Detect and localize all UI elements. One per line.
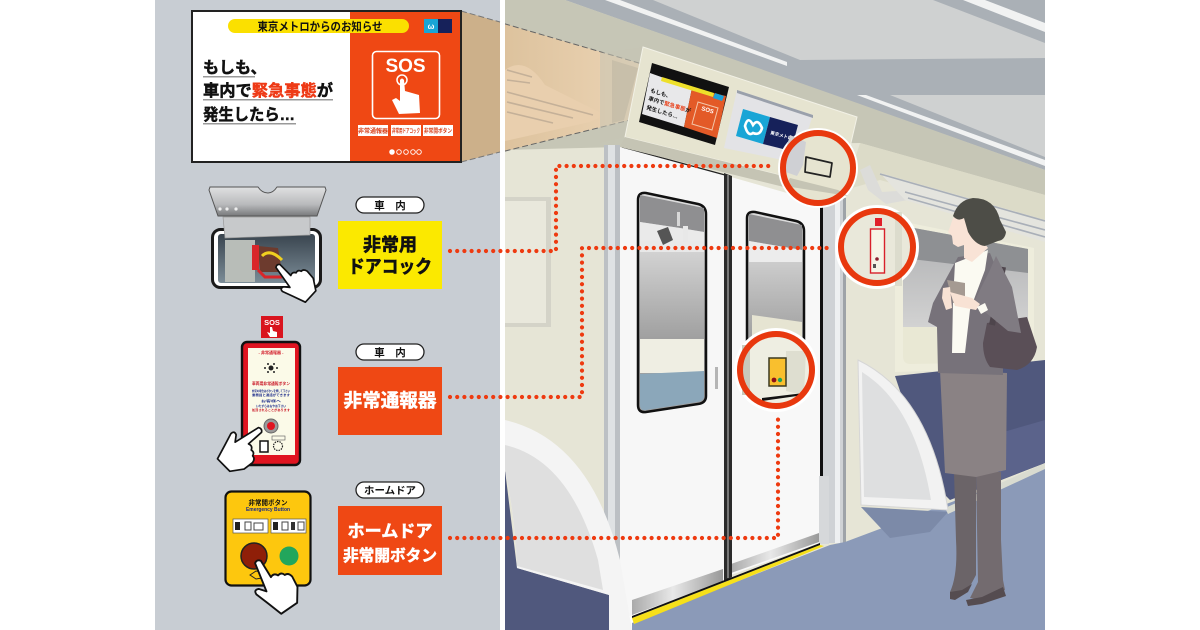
button panel: [226, 492, 310, 586]
callout circle: platform door button: [737, 328, 815, 409]
cock mechanism: [225, 240, 282, 282]
device text: 非常の場合はボタンを押して下さい: [252, 388, 290, 393]
neck and face: [948, 218, 988, 262]
notice pill: 東京メトロからのお知らせ: [258, 20, 382, 34]
orange box: [338, 367, 442, 435]
hinge plate: [223, 217, 310, 238]
dotted connector: platform door button: [450, 418, 778, 538]
callout circle: door cock: [778, 128, 858, 208]
SOS tag: [261, 316, 283, 338]
speaker and switch: [260, 436, 285, 452]
device text: - 非常通報器 -: [259, 349, 284, 355]
headline: 車内で緊急事態が: [203, 81, 333, 100]
on-board display: もしも、: [649, 87, 672, 100]
three small labels: [358, 125, 453, 136]
intercom illustration: [210, 316, 300, 478]
callout circle: emergency intercom: [835, 205, 919, 289]
metro sign: 東京メトロ: [769, 129, 793, 142]
green button: [280, 546, 298, 566]
orange box: [338, 506, 442, 575]
right door: [731, 177, 822, 575]
device text: 乗務員と通話ができます: [252, 392, 290, 397]
upper wall shade: [505, 0, 1045, 195]
seat partition right: [858, 360, 948, 510]
label: door cock: [338, 197, 442, 289]
jacket arm: [975, 256, 1021, 333]
skirt: [940, 370, 1007, 477]
SOS tag: SOS: [264, 318, 280, 327]
floor: [632, 463, 1045, 630]
white divider: [500, 0, 505, 630]
bag: [983, 317, 1037, 370]
notice pill: [228, 19, 409, 34]
device text: いたずらはおやめ下さい: [256, 403, 286, 408]
box text: [348, 235, 432, 277]
instruction plates: [233, 519, 306, 533]
label: intercom: [338, 344, 442, 435]
panel title: [246, 498, 291, 513]
device text: [252, 349, 290, 412]
location pill: 車 内: [374, 346, 406, 359]
door right black edge: [820, 198, 823, 476]
SOS button: [372, 52, 440, 118]
door cock illustration: [209, 187, 326, 310]
location pill: ホームドア: [364, 485, 416, 497]
right door window: [746, 210, 806, 341]
box text: 非常通報器: [344, 390, 437, 411]
box text: [343, 522, 437, 565]
SOS button: SOS: [385, 56, 426, 77]
door sill yellow strip: [632, 545, 824, 624]
location pill: 車 内: [374, 199, 406, 212]
metro logo: [424, 19, 452, 33]
ad frame on left wall: [505, 197, 551, 327]
red button: [241, 543, 267, 569]
small arrow: [250, 571, 262, 579]
seat partition left: [505, 420, 632, 630]
three small labels: 非常開ボタン: [424, 127, 452, 135]
dotted connector: door cock: [450, 166, 772, 251]
recess housing: [212, 230, 320, 288]
wall band above rack: [845, 143, 1045, 225]
metro logo: ω: [428, 22, 435, 31]
beam dashed edges: [461, 11, 500, 162]
woman: [928, 198, 1037, 606]
device face: [248, 348, 295, 455]
metro sign: [724, 90, 813, 163]
box text: 非常開ボタン: [343, 547, 437, 565]
device body: [242, 342, 300, 465]
on-board display: [639, 63, 729, 145]
left door: [620, 147, 725, 620]
ceiling: [566, 0, 1045, 170]
jacket body: [928, 253, 1003, 375]
orange half: [350, 12, 460, 161]
door centre gap: [724, 173, 732, 581]
dotted connector: intercom: [450, 248, 828, 397]
device text: お客様へ: [261, 398, 281, 403]
three small labels: 非常用ドアコック: [392, 127, 420, 135]
seat right: [895, 360, 1045, 500]
label: platform door: [338, 482, 442, 575]
bag strap: [992, 267, 1003, 325]
panel title: Emergency Button: [246, 507, 291, 513]
hand: [210, 419, 274, 478]
tan beam over left panel: [461, 11, 500, 162]
blouse: [952, 250, 988, 353]
door pillars: [604, 145, 846, 605]
phone and hands: [942, 280, 988, 314]
tan projection beam: [505, 23, 640, 152]
headline: [203, 59, 333, 124]
yellow box: [338, 221, 442, 289]
headline: 発生したら…: [203, 106, 295, 124]
wall: [505, 0, 1045, 630]
door handle: [715, 367, 718, 389]
box text: ドアコック: [348, 257, 432, 277]
on-board display: 車内で緊急事態が: [647, 94, 692, 115]
train interior scene: [461, 0, 1045, 630]
legs: [950, 472, 1006, 606]
three small labels: 非常通報器: [358, 127, 388, 135]
side window: [903, 228, 1028, 327]
hand: [268, 252, 322, 310]
panel title: 非常開ボタン: [248, 498, 288, 507]
hair: [953, 198, 1006, 246]
hand: [245, 550, 305, 620]
lifted lid: [209, 187, 326, 216]
page dots: [390, 150, 421, 154]
box text: 非常用: [363, 235, 417, 255]
call button: [264, 419, 278, 433]
platform door button illustration: [226, 492, 310, 620]
device text: 車両用非常通報ボタン: [252, 380, 290, 386]
luggage rack right: [860, 165, 1045, 242]
left door window: [638, 193, 706, 412]
on-board display: 発生したら…: [645, 103, 679, 121]
device text: 処罰されることがあります: [252, 407, 290, 412]
sign box: [600, 47, 857, 199]
left panel background: [155, 0, 500, 630]
information board: [192, 11, 461, 162]
recess interior: [218, 234, 315, 283]
headline: もしも、: [203, 59, 267, 77]
box text: ホームドア: [348, 522, 432, 541]
seat left: [505, 470, 609, 630]
on-board display: SOS: [700, 106, 714, 116]
